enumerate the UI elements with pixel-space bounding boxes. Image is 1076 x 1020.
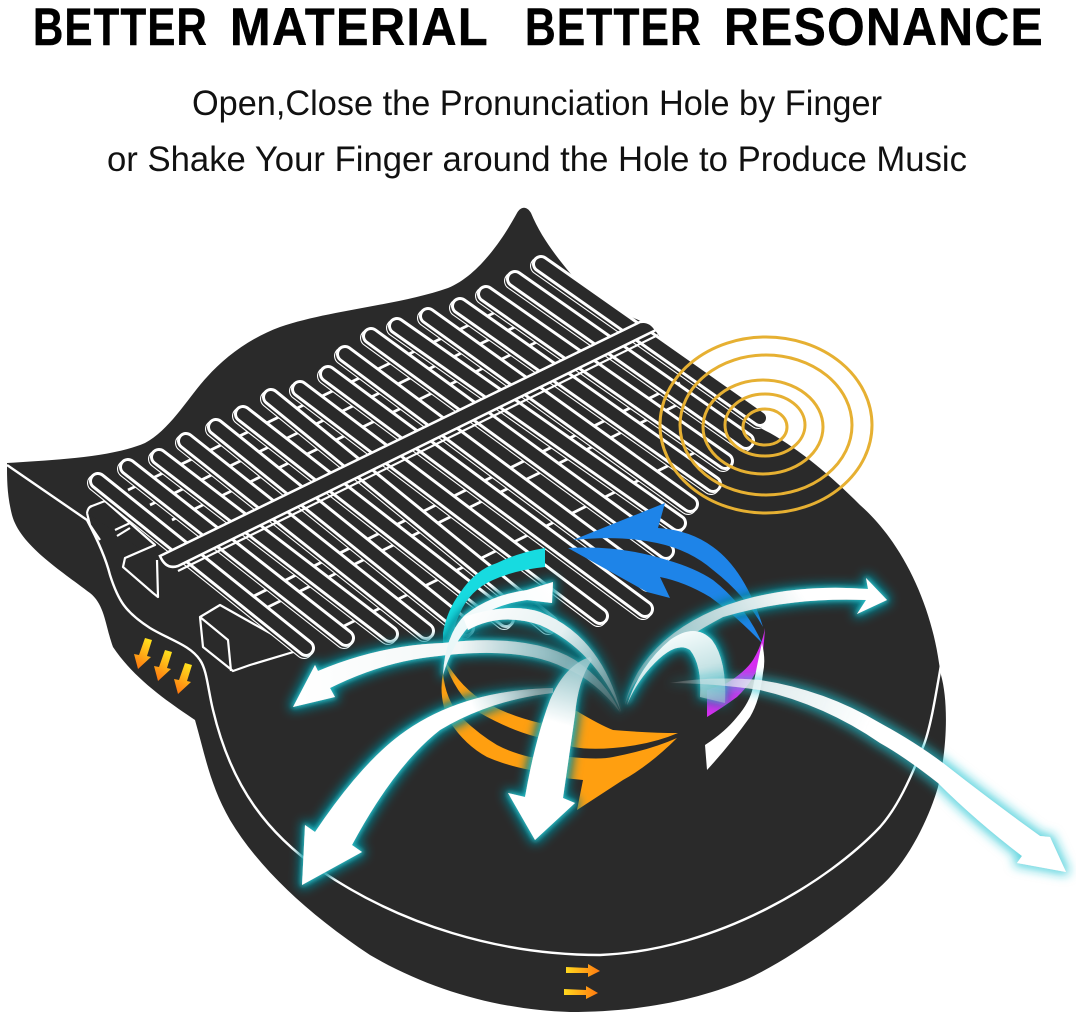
arrow: centre down	[508, 657, 592, 840]
subtitle line 2: or Shake Your Finger around the Hole to Produce Music	[107, 140, 967, 179]
arrow: centre arc	[463, 608, 621, 712]
sound rings	[660, 337, 872, 513]
blue arrow upper	[573, 503, 763, 627]
arrow: hook	[627, 631, 725, 705]
orange arrow upper	[443, 657, 678, 749]
kalimba illustration	[7, 208, 1066, 1012]
small orange arrows left	[134, 638, 192, 694]
tines	[96, 264, 760, 650]
arrow: bottom left	[302, 688, 553, 885]
kalimba body	[7, 208, 946, 1012]
title	[33, 0, 1044, 57]
small orange arrows bottom	[564, 964, 600, 999]
subtitle line 1: Open,Close the Pronunciation Hole by Finger	[192, 84, 882, 123]
arrow: long lower right	[670, 679, 1066, 872]
arrow: left	[293, 640, 620, 712]
bridge bar	[160, 322, 658, 571]
magenta arrow	[707, 628, 765, 717]
left tuning block	[87, 501, 158, 597]
cyan arc	[443, 548, 545, 650]
blue arrow lower	[568, 548, 762, 643]
lower tuning block	[200, 605, 300, 671]
body edge line	[7, 465, 941, 955]
arrow: small upper arc	[443, 582, 553, 675]
orange arrow lower	[442, 672, 677, 810]
glowing arrows	[293, 578, 887, 885]
arrow: right	[625, 578, 887, 705]
white curl arrow	[705, 643, 764, 770]
